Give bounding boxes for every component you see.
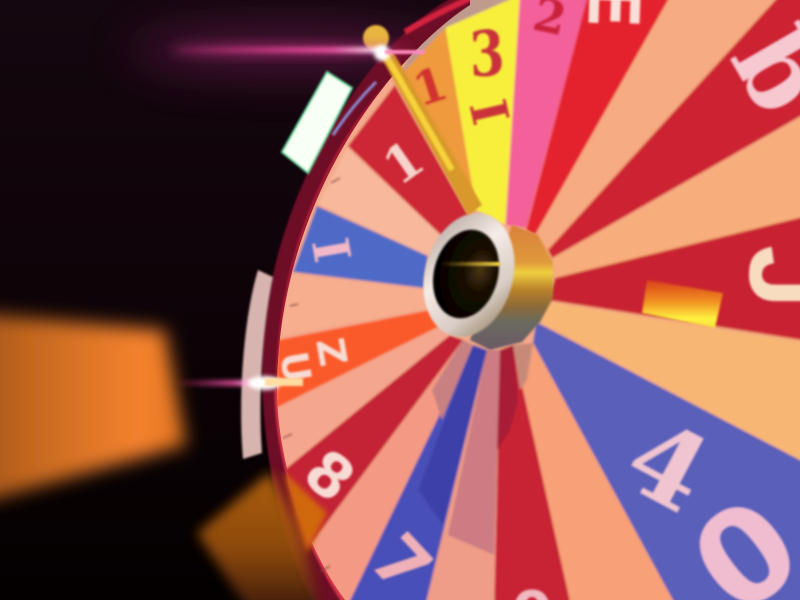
wedge: peach top <box>535 0 780 250</box>
wheel face wedges <box>260 0 800 600</box>
orange overlay on red wedge <box>284 472 327 553</box>
wedge: red 1 <box>348 85 470 240</box>
hub shadow on peach <box>448 350 500 555</box>
wedge: red b <box>548 0 800 258</box>
wedge labels: I <box>459 94 522 130</box>
rim ticks <box>283 178 340 572</box>
hub shadow on right peach <box>513 343 533 390</box>
wedge: yellow <box>445 0 520 225</box>
wedge: pink <box>506 0 588 228</box>
wedge labels <box>271 0 800 600</box>
wedge: blue I <box>293 206 428 288</box>
wedge labels: 1 <box>407 56 454 117</box>
wedge: peach lower right <box>540 302 800 468</box>
wedge labels: 1 <box>372 128 434 197</box>
blurred orange block <box>0 312 186 508</box>
hub shadow on lower-left peach <box>432 340 473 420</box>
wedge: peach upper left <box>318 148 446 256</box>
wedge: blue 40 <box>533 322 800 600</box>
hub glint <box>440 262 500 266</box>
silver arc <box>241 270 273 459</box>
orange patch below wheel <box>197 472 322 600</box>
hub shadow on red <box>497 345 518 450</box>
green light block <box>282 72 352 173</box>
wedge: red J <box>548 214 800 342</box>
gold patch on J wedge <box>642 280 723 328</box>
hub hole <box>423 222 509 326</box>
wedge: peach left low <box>277 328 450 470</box>
wedge labels: 3 <box>468 17 506 92</box>
hub ring <box>410 203 528 347</box>
wedge: peach lower left <box>312 354 453 600</box>
wedge: peach bottom <box>522 346 672 600</box>
wedge: peach left <box>278 274 430 336</box>
wedge labels: 4 <box>606 394 729 538</box>
purple glow <box>130 26 450 74</box>
wedge: red bottom <box>494 345 573 600</box>
wedge: red 8 <box>282 335 463 552</box>
wedge: red top <box>526 0 671 235</box>
wedge: peach bottom 2 <box>427 413 495 600</box>
flare left <box>175 376 303 390</box>
hub shadow on blue <box>418 345 487 525</box>
wedge labels: Z <box>307 335 355 370</box>
hub cone <box>470 225 553 350</box>
flare top <box>170 43 425 61</box>
wedge labels: U <box>271 348 320 386</box>
wedge labels: I <box>301 233 364 267</box>
wedge: blue 7 <box>343 345 487 600</box>
wedge labels: 8 <box>290 436 367 516</box>
rim <box>262 0 490 600</box>
wedge: orange 1 <box>400 25 476 215</box>
silver edge top <box>402 0 511 72</box>
wedge: peach right <box>552 110 800 278</box>
wedge: orange UZ <box>276 310 440 408</box>
pointer <box>363 25 482 215</box>
